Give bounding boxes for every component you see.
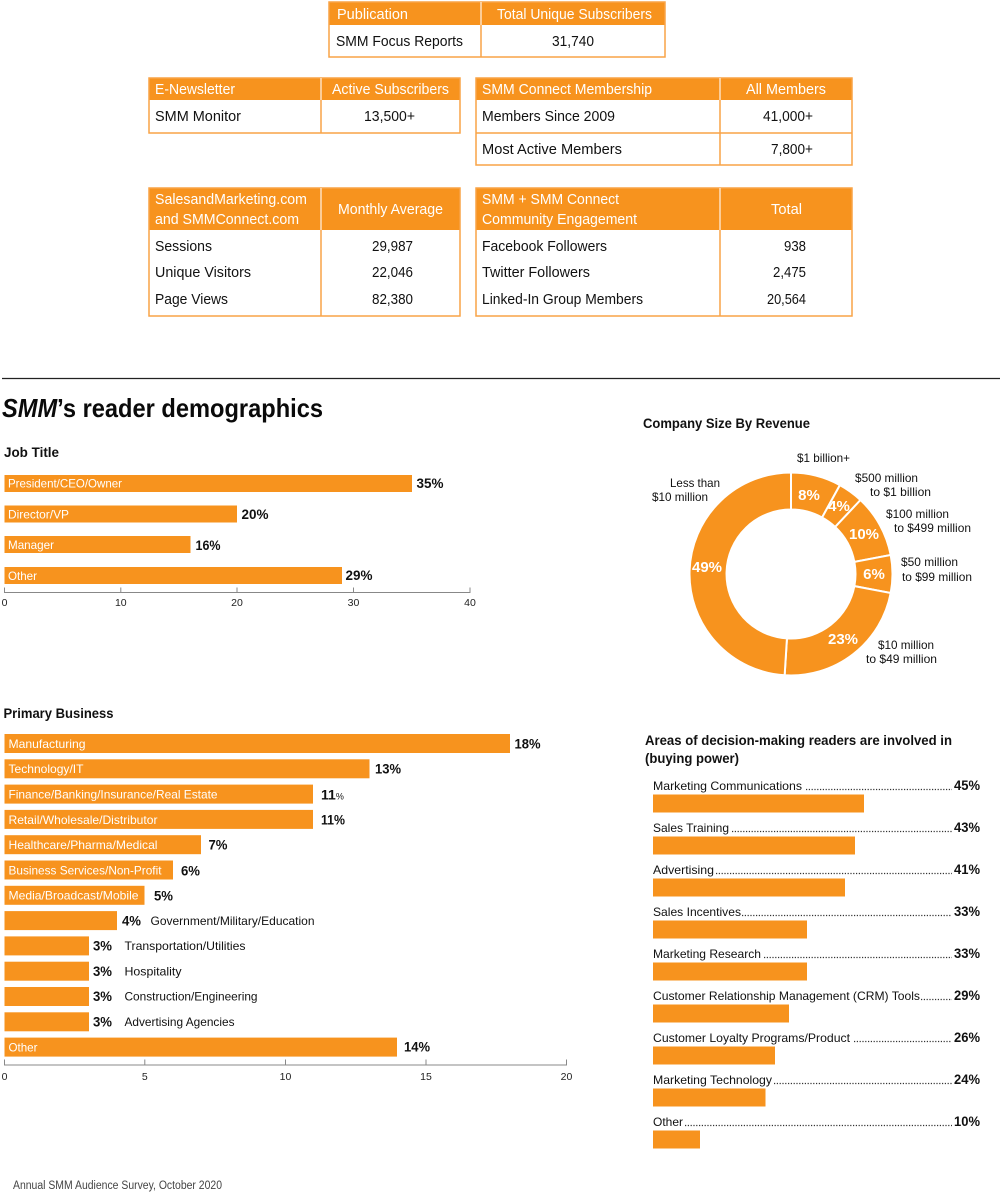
chart: job title: Manager <box>8 538 54 552</box>
table: website traffic: 22,046 <box>372 265 413 281</box>
heading: job title: Job Title <box>4 445 59 460</box>
chart: areas of decision-making: 29% <box>954 987 981 1003</box>
chart: job title: Director/VP <box>8 508 69 522</box>
chart: areas of decision-making: Customer Relationship Management (CRM) Tools <box>653 989 920 1003</box>
chart: areas of decision-making: 41% <box>954 861 981 877</box>
table: publication: Publication <box>337 7 408 23</box>
chart: company size by revenue: $10 million <box>652 490 708 504</box>
table: community engagement: Facebook Followers <box>482 239 607 255</box>
chart: primary business: Advertising Agencies <box>124 1015 234 1029</box>
table: SMM Connect membership: SMM Connect Membership <box>482 82 652 98</box>
table: community engagement: Total <box>771 202 802 218</box>
table: community engagement <box>476 188 852 316</box>
chart: primary business: 13% <box>375 760 402 776</box>
table: e-newsletter: 13,500+ <box>364 109 415 125</box>
chart: areas of decision-making: 33% <box>954 903 981 919</box>
table: website traffic: Sessions <box>155 239 212 255</box>
chart: job title: 20 <box>231 597 243 609</box>
chart: primary business: 5 <box>142 1071 148 1083</box>
chart: primary business: 7% <box>208 836 228 852</box>
chart: primary business: 5% <box>154 888 174 904</box>
chart: primary business: 0 <box>2 1071 8 1083</box>
chart: primary business: 10 <box>280 1071 291 1083</box>
chart: primary business <box>2 706 572 1083</box>
chart: primary business: Finance/Banking/Insurance/Real Estate <box>8 788 218 802</box>
chart: job title: President/CEO/Owner <box>8 476 122 490</box>
chart: primary business: Healthcare/Pharma/Medical <box>8 838 158 852</box>
chart: areas of decision-making: Sales Training <box>653 821 729 835</box>
chart: company size by revenue: 23% <box>828 631 858 648</box>
table: publication: Total Unique Subscribers <box>497 7 652 23</box>
chart: primary business: Media/Broadcast/Mobile <box>8 888 139 902</box>
chart: primary business: 14% <box>404 1038 431 1054</box>
chart: company size by revenue: 8% <box>798 487 820 504</box>
table: website traffic: Page Views <box>155 292 228 308</box>
chart: primary business: Transportation/Utilities <box>124 939 246 953</box>
table: SMM Connect membership: 41,000+ <box>763 109 813 125</box>
table: community engagement: 2,475 <box>773 265 806 281</box>
chart: company size by revenue: $50 million <box>901 555 958 569</box>
chart: company size by revenue: 10% <box>849 526 879 543</box>
chart: primary business: 3% <box>93 938 113 954</box>
chart: areas of decision-making: Customer Loyalty Programs/Product <box>653 1031 851 1045</box>
table: website traffic: 82,380 <box>372 292 413 308</box>
chart: company size by revenue: to $1 billion <box>870 485 931 499</box>
chart: primary business: Technology/IT <box>8 762 84 776</box>
table: e-newsletter: E-Newsletter <box>155 82 235 98</box>
source note: Annual SMM Audience Survey, October 2020 <box>13 1180 222 1192</box>
chart: company size by revenue: to $499 million <box>894 521 971 535</box>
chart: company size by revenue: to $99 million <box>902 570 972 584</box>
chart: job title: 30 <box>348 597 359 609</box>
table: website traffic: Monthly Average <box>338 202 443 218</box>
chart: areas of decision-making: 24% <box>954 1071 981 1087</box>
chart: primary business: 18% <box>514 736 541 752</box>
table: e-newsletter: SMM Monitor <box>155 109 241 125</box>
chart: company size by revenue: 49% <box>692 559 722 576</box>
table: website traffic <box>149 188 460 316</box>
chart: job title: 35% <box>416 475 444 491</box>
chart: areas of decision-making <box>645 733 981 1148</box>
chart: job title: 16% <box>196 537 221 553</box>
chart: job title: 20% <box>242 506 269 522</box>
chart: company size by revenue: to $49 million <box>866 652 937 666</box>
chart: primary business: Hospitality <box>124 964 182 978</box>
chart: primary business: 3% <box>93 1014 113 1030</box>
chart: job title: 29% <box>346 567 373 583</box>
chart: primary business: Other <box>8 1040 38 1054</box>
table: SMM Connect membership <box>476 78 852 165</box>
table: website traffic: and SMMConnect.com <box>155 212 299 228</box>
table: community engagement: SMM + SMM Connect <box>482 192 619 208</box>
chart: primary business: Retail/Wholesale/Distributor <box>8 813 158 827</box>
chart: primary business: 20 <box>561 1071 572 1083</box>
table: SMM Connect membership: 7,800+ <box>771 142 813 158</box>
chart: primary business: Business Services/Non-Profit <box>8 864 162 878</box>
chart: company size by revenue: $500 million <box>855 471 918 485</box>
chart: company size by revenue: Less than <box>670 476 720 490</box>
chart: areas of decision-making: Sales Incentives <box>653 905 741 919</box>
chart: areas of decision-making: Marketing Technology <box>653 1073 772 1087</box>
heading: decision-making: Areas of decision-making readers are involved in <box>645 733 952 748</box>
chart: areas of decision-making: 26% <box>954 1029 981 1045</box>
heading: primary business: Primary Business <box>4 706 114 721</box>
chart: primary business: 6% <box>181 862 201 878</box>
chart: areas of decision-making: 10% <box>954 1113 981 1129</box>
chart: job title: 0 <box>2 597 8 609</box>
table: publication: SMM Focus Reports <box>336 34 463 50</box>
chart: primary business: 3% <box>93 988 113 1004</box>
chart: primary business: Manufacturing <box>8 737 86 751</box>
chart: primary business: 4% <box>122 912 142 928</box>
table: website traffic: 29,987 <box>372 239 413 255</box>
chart: areas of decision-making: 45% <box>954 777 981 793</box>
chart: areas of decision-making: 43% <box>954 819 981 835</box>
table: SMM Connect membership: All Members <box>746 82 826 98</box>
chart: areas of decision-making: Marketing Research <box>653 947 761 961</box>
heading: company size: Company Size By Revenue <box>643 416 810 431</box>
chart: areas of decision-making: Marketing Communications <box>653 779 802 793</box>
table: SMM Connect membership: Most Active Members <box>482 142 622 158</box>
chart: job title: 10 <box>115 597 127 609</box>
chart: company size by revenue: 4% <box>828 498 850 515</box>
chart: company size by revenue: $10 million <box>878 638 934 652</box>
chart: areas of decision-making: Other <box>653 1115 683 1129</box>
table: e-newsletter <box>149 78 460 133</box>
table: website traffic: Unique Visitors <box>155 265 251 281</box>
chart: job title: 40 <box>464 597 476 609</box>
chart: job title: Other <box>8 569 37 583</box>
chart: primary business: Construction/Engineering <box>124 990 258 1004</box>
table: website traffic: SalesandMarketing.com <box>155 192 307 208</box>
chart: primary business: 11% <box>321 812 345 828</box>
chart: areas of decision-making: Advertising <box>653 863 714 877</box>
chart: primary business: 11% <box>321 786 344 802</box>
chart: company size by revenue: $1 billion+ <box>797 451 850 465</box>
chart: job title <box>2 445 476 609</box>
title: SMM’s reader demographics <box>2 393 323 423</box>
chart: areas of decision-making: 33% <box>954 945 981 961</box>
table: community engagement: 20,564 <box>767 292 806 308</box>
donut chart <box>689 472 892 675</box>
chart: primary business: Government/Military/Education <box>150 914 314 928</box>
chart: primary business: 15 <box>420 1071 432 1083</box>
table: e-newsletter: Active Subscribers <box>332 82 449 98</box>
table: publication: 31,740 <box>552 34 594 50</box>
table: publication <box>329 2 665 57</box>
chart: areas of decision-making: (buying power) <box>645 751 739 766</box>
chart: company size by revenue <box>643 416 972 675</box>
table: community engagement: Linked-In Group Members <box>482 292 643 308</box>
chart: primary business: 3% <box>93 963 113 979</box>
table: community engagement: Community Engagement <box>482 212 637 228</box>
chart: company size by revenue: $100 million <box>886 507 949 521</box>
table: community engagement: Twitter Followers <box>482 265 590 281</box>
table: SMM Connect membership: Members Since 2009 <box>482 109 615 125</box>
chart: company size by revenue: 6% <box>863 566 885 583</box>
table: community engagement: 938 <box>784 239 806 255</box>
